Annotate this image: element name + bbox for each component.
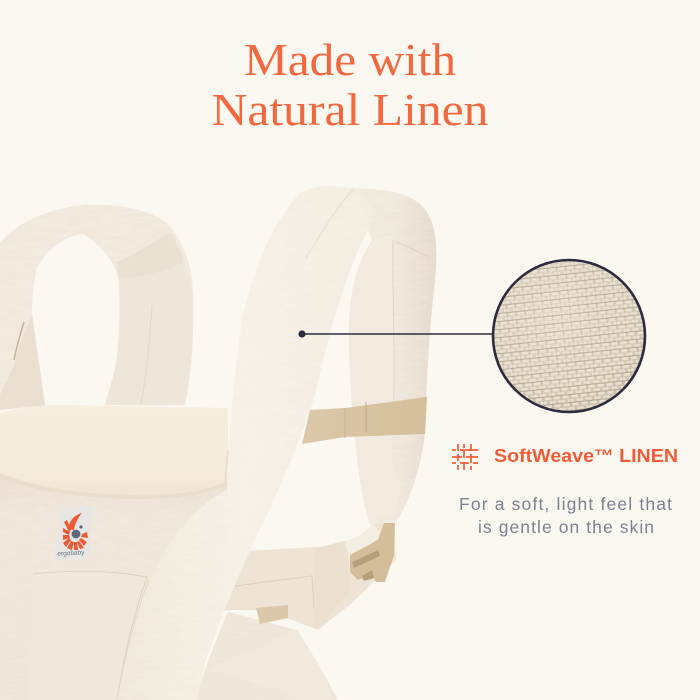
feature description: is gentle on the skin <box>478 517 654 537</box>
title: Natural Linen <box>212 84 488 135</box>
pointer dot <box>298 330 306 338</box>
strap seam <box>393 240 432 430</box>
buckle <box>350 523 395 582</box>
logo dot <box>79 525 83 529</box>
head support hood <box>0 405 228 499</box>
top padding band <box>117 232 184 278</box>
belt end panel <box>312 541 350 629</box>
belt stitching <box>235 576 314 608</box>
ergobaby label tag <box>55 506 94 560</box>
lower pocket panel <box>195 605 338 700</box>
strap bottom edge shadow <box>225 450 228 490</box>
baby carrier product illustration <box>0 186 436 700</box>
inner loop padding <box>105 262 193 405</box>
icon: weave hash <box>452 444 478 470</box>
title <box>212 34 488 135</box>
tan adjustment strap <box>302 397 427 444</box>
linen fabric swatch circle <box>493 260 645 412</box>
title: Made with <box>244 34 456 85</box>
front shoulder strap <box>117 186 377 700</box>
feature description <box>459 494 672 537</box>
strap ridge between double layers <box>306 190 353 258</box>
centre seam panel <box>28 571 147 700</box>
inner strap padding <box>349 238 402 518</box>
right rear shoulder strap <box>349 188 436 525</box>
waist belt <box>224 522 396 630</box>
logo centre <box>72 530 80 538</box>
left rear shoulder loop <box>0 205 193 410</box>
callout leader line <box>298 330 495 338</box>
pocket snap tab <box>256 605 288 624</box>
padding seam <box>141 305 152 405</box>
fold shadow <box>0 315 45 410</box>
front body panel <box>0 470 230 700</box>
feature description: For a soft, light feel that <box>459 494 672 514</box>
brand name: ergobaby <box>57 549 85 558</box>
logo mark <box>63 513 88 550</box>
feature heading: SoftWeave™ LINEN <box>494 446 678 466</box>
